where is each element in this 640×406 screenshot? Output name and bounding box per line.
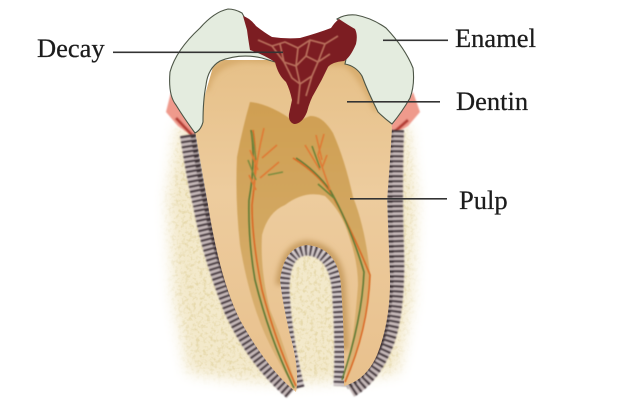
label: Decay: Decay <box>37 33 105 63</box>
tooth diagram <box>38 8 536 398</box>
enamel right cap <box>337 15 414 124</box>
gums <box>166 92 420 136</box>
label: Enamel: Enamel <box>455 23 536 53</box>
label: Dentin: Dentin <box>456 86 528 116</box>
pulp chamber and canals <box>236 102 370 391</box>
label: Pulp: Pulp <box>459 185 508 215</box>
periodontal ligament <box>188 130 396 392</box>
bone surrounding the roots <box>160 124 424 390</box>
enamel left cap <box>170 9 275 133</box>
left blood vessels and nerve <box>248 128 296 388</box>
right blood vessels and nerve <box>293 134 370 382</box>
dentin <box>195 58 392 392</box>
decay <box>243 16 357 124</box>
